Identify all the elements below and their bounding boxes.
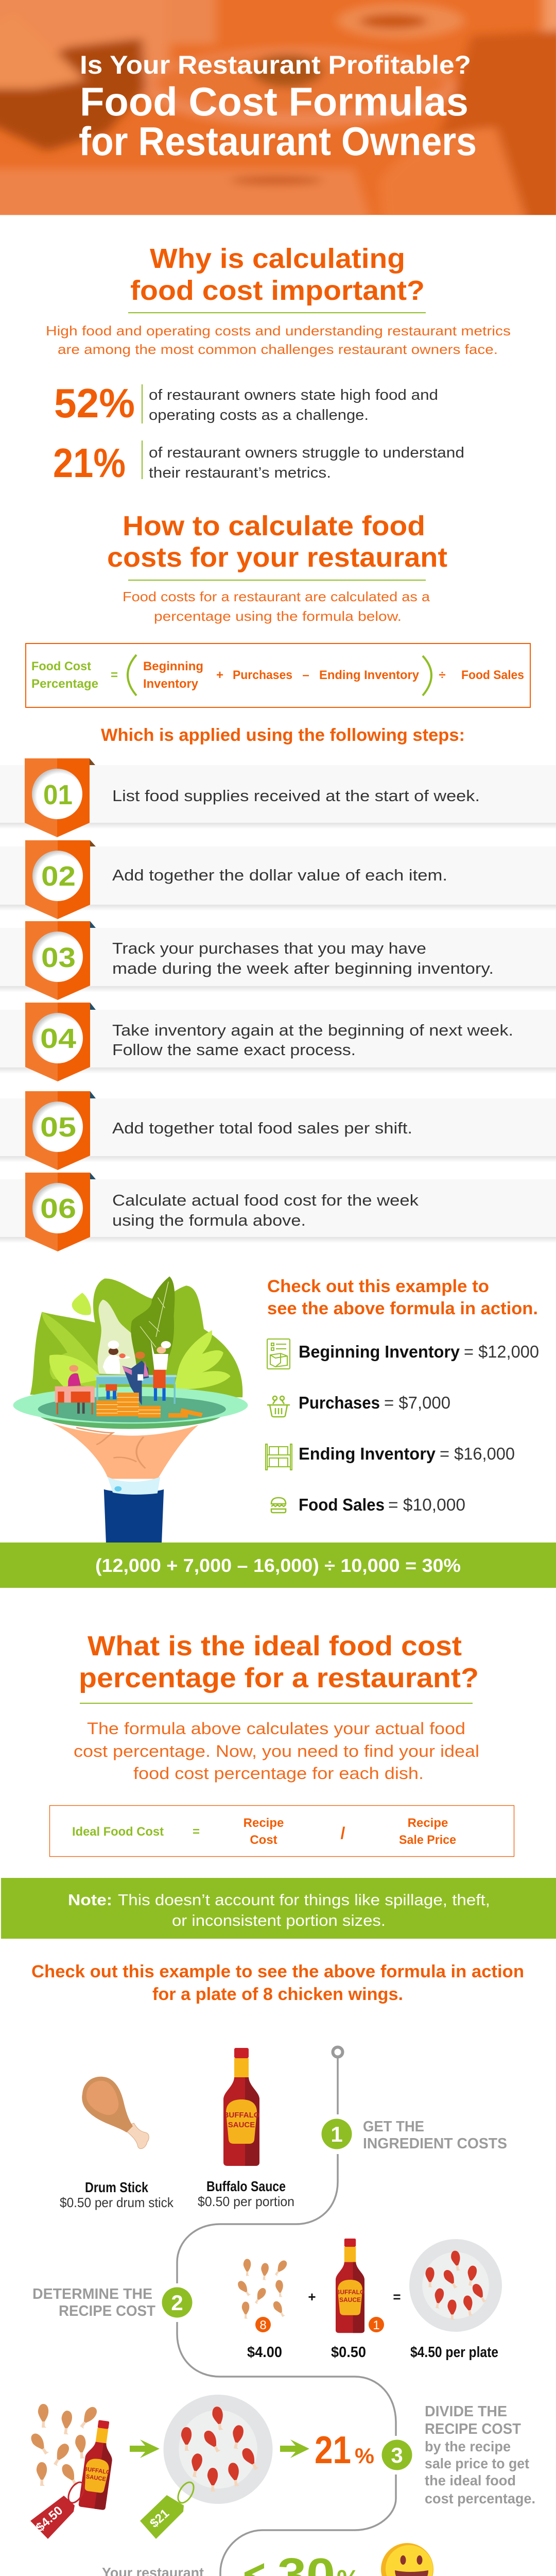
price tag: $4.50 — [30, 2480, 87, 2539]
intro text: Food costs for a restaurant are calculated as a — [123, 589, 430, 604]
intro text: percentage using the formula below. — [154, 608, 402, 624]
icon: sauce bottle — [336, 2239, 364, 2333]
note bar — [1, 1878, 556, 1939]
intro text: High food and operating costs and understanding restaurant metrics — [46, 323, 511, 338]
heading — [107, 511, 447, 581]
step 1: get the ingredient costs — [60, 2048, 507, 2210]
flow path — [177, 2047, 429, 2576]
hero title: Is Your Restaurant Profitable? — [80, 50, 471, 79]
icon: sauce bottle: BUFFALO — [83, 2466, 111, 2476]
icon: plate of wings — [164, 2395, 273, 2504]
stat: 21%: their restaurant’s metrics. — [149, 465, 331, 481]
heading: food cost important? — [130, 275, 425, 306]
plus: + — [308, 2289, 316, 2304]
purchases value — [299, 1393, 450, 1412]
step label: DETERMINE THE — [32, 2286, 152, 2302]
step label: DIVIDE THE — [425, 2403, 507, 2420]
ideal formula box: Recipe — [408, 1816, 448, 1830]
step 05: 05 — [40, 1112, 76, 1143]
worked example heading — [31, 1962, 524, 2004]
note bar: This doesn’t account for things like spillage, theft, — [118, 1891, 490, 1909]
ending inventory value: = $16,000 — [440, 1444, 515, 1463]
drumstick cost: Drum Stick — [85, 2179, 148, 2195]
intro text — [74, 1719, 479, 1783]
note bar: or inconsistent portion sizes. — [172, 1911, 386, 1929]
hero background photo — [0, 0, 556, 236]
heading: percentage for a restaurant? — [79, 1663, 479, 1693]
icon: buffalo sauce bottle: SAUCE — [228, 2121, 255, 2129]
formula box: ÷ — [439, 668, 446, 682]
icon: sauce bottle — [78, 2419, 118, 2510]
ending inventory value: Ending Inventory — [299, 1444, 436, 1463]
step 04: Take inventory again at the beginning of next week. — [112, 1021, 513, 1039]
step 03: 03 — [41, 942, 76, 973]
heading: costs for your restaurant — [107, 542, 447, 573]
formula box — [26, 643, 530, 707]
intro text: are among the most common challenges restaurant owners face. — [58, 342, 498, 357]
ideal formula box: Cost — [250, 1833, 277, 1847]
hero title: Food Cost Formulas — [80, 79, 468, 124]
ideal formula box: Ideal Food Cost — [72, 1825, 164, 1839]
step 01: List food supplies received at the start of week. — [112, 787, 480, 805]
step marker: 1 — [331, 2122, 343, 2146]
price tag: $4.50: $4.50 — [33, 2503, 65, 2535]
purchases value: = $7,000 — [384, 1393, 450, 1412]
food sales value: Food Sales — [299, 1495, 385, 1514]
illustration: hand holding plate with restaurant scene — [13, 1277, 248, 1543]
section: ideal food cost percentage — [1, 1631, 556, 2004]
food sales value — [299, 1495, 465, 1514]
section: why calculating food cost is important — [46, 243, 511, 486]
cost values: $4.00 — [247, 2344, 282, 2361]
icon: plate of wings — [409, 2239, 502, 2332]
hero title: for Restaurant Owners — [79, 118, 477, 164]
step 06 — [0, 1173, 556, 1251]
step 03: Track your purchases that you may have — [112, 939, 426, 957]
formula box: – — [302, 668, 309, 682]
worked example heading: for a plate of 8 chicken wings. — [152, 1985, 403, 2004]
result: 21%: % — [355, 2444, 374, 2468]
step 06: using the formula above. — [112, 1211, 306, 1229]
icon: sauce bottle: SAUCE — [85, 2473, 107, 2483]
price tag: $21: $21 — [147, 2506, 172, 2531]
icon: sauce bottle: BUFFALO — [336, 2289, 364, 2296]
step label: the ideal food — [425, 2472, 516, 2488]
step 02: Add together the dollar value of each item. — [112, 866, 447, 884]
stat: 21%: of restaurant owners struggle to understand — [149, 445, 464, 461]
icon: inventory list — [267, 1339, 290, 1369]
step marker — [382, 2440, 412, 2470]
leaves — [30, 1277, 242, 1397]
step marker: 3 — [391, 2443, 403, 2467]
example heading — [267, 1277, 538, 1318]
ideal formula box: Recipe — [244, 1816, 284, 1830]
heading: Why is calculating — [150, 243, 405, 274]
intro text: cost percentage. Now, you need to find your ideal — [74, 1742, 479, 1760]
drumstick cost — [60, 2179, 174, 2210]
heading — [128, 243, 426, 313]
result bar: (12,000 + 7,000 – 16,000) ÷ 10,000 = 30% — [95, 1555, 461, 1576]
formula box: = — [111, 668, 118, 682]
step 03: made during the week after beginning inventory. — [112, 959, 494, 977]
badge 8: 8 — [259, 2318, 267, 2332]
formula box: Food Sales — [461, 668, 524, 682]
formula box: Beginning — [143, 659, 203, 673]
icon: drumstick — [82, 2077, 149, 2149]
heading: How to calculate food — [123, 511, 425, 541]
step 3: divide the recipe cost — [29, 2395, 535, 2539]
step 06: Calculate actual food cost for the week — [112, 1191, 419, 1209]
step 01 — [0, 758, 556, 837]
step label — [32, 2286, 155, 2319]
ideal formula box: Sale Price — [399, 1833, 456, 1847]
cost values — [247, 2344, 498, 2361]
badge 1: 1 — [373, 2318, 380, 2332]
step marker: 2 — [171, 2291, 183, 2315]
step 04 — [0, 1003, 556, 1081]
step label: sale price to get — [425, 2455, 529, 2471]
arrow — [130, 2439, 160, 2458]
step label: GET THE — [363, 2119, 424, 2135]
formula box: + — [216, 668, 223, 682]
intro text: The formula above calculates your actual food — [87, 1719, 465, 1738]
food sales value: = $10,000 — [388, 1495, 465, 1514]
stat: 21% — [53, 440, 464, 486]
step 02: 02 — [41, 861, 76, 892]
icon: shelves — [266, 1444, 292, 1470]
icon: sauce bottle: SAUCE — [339, 2296, 361, 2303]
beginning inventory value: = $12,000 — [464, 1342, 539, 1361]
price tag: $21 — [140, 2480, 197, 2539]
intro text: food cost percentage for each dish. — [133, 1764, 424, 1783]
formula box: Purchases — [233, 668, 292, 682]
ideal formula box: / — [341, 1824, 345, 1842]
section: how to calculate food costs — [0, 511, 556, 1251]
step 01: 01 — [43, 779, 73, 810]
stat: 52%: of restaurant owners state high food and — [149, 387, 438, 403]
purchases value: Purchases — [299, 1393, 380, 1412]
step 04: Follow the same exact process. — [112, 1041, 356, 1059]
badge 1 — [369, 2317, 384, 2332]
target food cost comparison — [102, 2543, 434, 2576]
step label — [363, 2119, 507, 2152]
result bar — [0, 1543, 556, 1588]
icon: eight drumsticks — [236, 2259, 289, 2319]
icon: drumsticks — [29, 2404, 99, 2488]
ideal formula box — [49, 1805, 514, 1857]
icon: happy face — [381, 2543, 433, 2576]
scene: table and staff — [55, 1340, 177, 1414]
formula box: Percentage — [31, 677, 98, 691]
formula box: Food Cost — [31, 659, 91, 673]
icon: basket — [267, 1396, 290, 1417]
example heading: see the above formula in action. — [267, 1299, 538, 1318]
icon: buffalo sauce bottle — [223, 2048, 260, 2166]
step 02 — [0, 840, 556, 919]
step marker — [162, 2287, 193, 2317]
hand and sleeve — [51, 1423, 199, 1543]
stat: 52%: 52% — [54, 380, 135, 426]
step 04: 04 — [40, 1023, 76, 1054]
stat: 21%: 21% — [53, 440, 126, 486]
formula box: Ending Inventory — [319, 668, 420, 682]
hero banner — [0, 0, 556, 236]
intro text — [46, 323, 511, 357]
step 03 — [0, 921, 556, 1000]
cost values: $4.50 per plate — [410, 2344, 498, 2361]
plate — [13, 1387, 248, 1429]
equals: = — [393, 2289, 401, 2304]
heading — [79, 1631, 479, 1704]
example: formula values — [266, 1277, 539, 1514]
badge 8 — [255, 2317, 271, 2332]
result: 21%: 21 — [315, 2428, 351, 2471]
note bar: Note: — [68, 1891, 112, 1909]
drumstick cost: $0.50 per drum stick — [60, 2195, 174, 2210]
steps heading: Which is applied using the following steps: — [101, 725, 465, 745]
step label: cost percentage. — [425, 2490, 535, 2506]
step label — [425, 2403, 535, 2506]
arrow — [280, 2439, 309, 2458]
ending inventory value — [299, 1444, 515, 1463]
step marker — [321, 2119, 352, 2149]
beginning inventory value — [299, 1342, 539, 1361]
step 06: 06 — [40, 1193, 76, 1224]
heading: What is the ideal food cost — [88, 1631, 462, 1662]
less than 30% — [245, 2549, 360, 2576]
icon: burger — [271, 1498, 286, 1513]
intro text — [123, 589, 430, 624]
step label: INGREDIENT COSTS — [363, 2136, 507, 2152]
hero title — [79, 50, 477, 164]
worked example heading: Check out this example to see the above formula in action — [31, 1962, 524, 1981]
example heading: Check out this example to — [267, 1277, 489, 1296]
sauce cost: Buffalo Sauce — [206, 2178, 286, 2194]
ideal formula box: = — [193, 1825, 200, 1839]
cost values: $0.50 — [331, 2344, 366, 2361]
stat: 52% — [54, 380, 438, 426]
stat: 52%: operating costs as a challenge. — [149, 407, 369, 423]
step 05 — [0, 1091, 556, 1170]
step label: by the recipe — [425, 2438, 511, 2454]
step label: RECIPE COST — [59, 2303, 155, 2319]
icon: buffalo sauce bottle: BUFFALO — [223, 2111, 260, 2120]
step label: RECIPE COST — [425, 2421, 521, 2437]
step 05: Add together total food sales per shift. — [112, 1119, 412, 1137]
formula box: Inventory — [143, 677, 199, 691]
sauce cost — [198, 2178, 294, 2209]
beginning inventory value: Beginning Inventory — [299, 1342, 460, 1361]
step 2: determine the recipe cost — [32, 2239, 502, 2361]
coins — [96, 1393, 203, 1418]
sauce cost: $0.50 per portion — [198, 2194, 294, 2209]
